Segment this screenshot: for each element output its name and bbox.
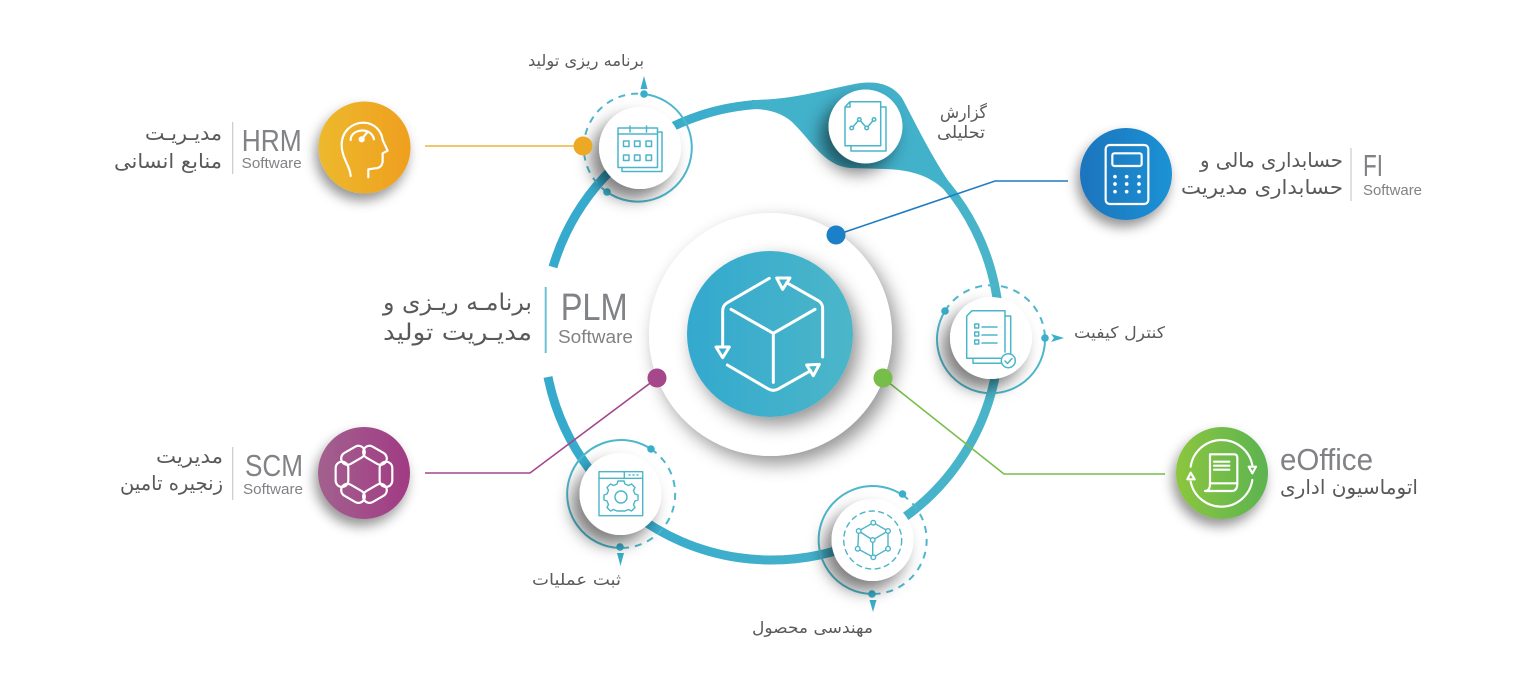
title: HRM: HRM xyxy=(242,123,302,158)
dot: FI xyxy=(826,226,846,244)
module: HRM xyxy=(114,102,410,194)
label: analytical report xyxy=(937,102,988,143)
icon: checklist document xyxy=(967,311,1015,368)
node: quality control xyxy=(937,285,1064,393)
icon: head with gauge xyxy=(342,123,388,177)
node: production planning xyxy=(574,76,692,202)
dot: eOffice xyxy=(874,368,892,388)
icon: chain hexagon xyxy=(336,443,392,505)
description: SCM: زنجیره تامین xyxy=(120,471,223,495)
title: eOffice: eOffice xyxy=(1280,442,1373,477)
dot: HRM xyxy=(574,136,592,156)
connector: eOffice xyxy=(883,378,1165,474)
title: FI: FI xyxy=(1363,148,1383,183)
icon: scroll with cycle xyxy=(1187,440,1256,507)
module: FI xyxy=(1080,128,1422,220)
icon: calendar xyxy=(618,126,662,172)
description: PLM: مدیـریت تولید xyxy=(383,320,532,346)
icon: window with gear xyxy=(599,472,643,516)
connector: SCM xyxy=(425,378,657,473)
subtitle: Software: Software xyxy=(243,482,303,498)
dot: SCM xyxy=(648,368,666,388)
label: quality control: کنترل کیفیت xyxy=(1074,323,1165,343)
description: SCM: مدیریت xyxy=(156,444,223,468)
module: SCM xyxy=(120,427,410,519)
icon: calculator xyxy=(1106,145,1148,204)
centre hub xyxy=(649,213,892,456)
connector: FI xyxy=(836,181,1068,235)
description: FI: حسابداری مالی و xyxy=(1199,148,1343,172)
module: PLM xyxy=(382,287,633,353)
description: PLM: برنامـه ریـزی و xyxy=(382,290,532,316)
module: eOffice xyxy=(1176,427,1418,519)
description: HRM xyxy=(114,121,222,173)
label: analytical report: گزارش xyxy=(940,102,988,123)
ring bulge behind report node xyxy=(752,83,961,199)
icon: cube with cycle arrows xyxy=(716,278,823,390)
subtitle: Software: Software xyxy=(242,156,302,172)
connector: HRM xyxy=(425,145,583,147)
description: HRM: مدیـریـت xyxy=(145,121,222,145)
subtitle: Software: Software xyxy=(1363,183,1422,199)
title: PLM: PLM xyxy=(561,287,628,329)
description: FI: حسابداری مدیریت xyxy=(1181,175,1343,199)
node: product engineering xyxy=(819,486,927,612)
subtitle: Software: Software xyxy=(558,326,633,347)
label: production planning: برنامه ریزی تولید xyxy=(528,51,644,71)
icon: report xyxy=(845,102,886,151)
label: analytical report: تحلیلی xyxy=(937,123,985,143)
description: SCM xyxy=(120,444,223,495)
description: eOffice: اتوماسیون اداری xyxy=(1280,475,1418,499)
main ring xyxy=(548,83,1000,560)
description: FI xyxy=(1181,148,1343,199)
icon: cube xyxy=(844,511,902,569)
description: PLM xyxy=(382,290,532,346)
label: operations record: ثبت عملیات xyxy=(532,570,621,589)
node: analytical report xyxy=(828,90,902,164)
title: SCM: SCM xyxy=(245,448,303,483)
node: operations record xyxy=(567,440,675,566)
label: product engineering: مهندسی محصول xyxy=(752,618,873,638)
description: HRM: منابع انسانی xyxy=(114,149,222,173)
